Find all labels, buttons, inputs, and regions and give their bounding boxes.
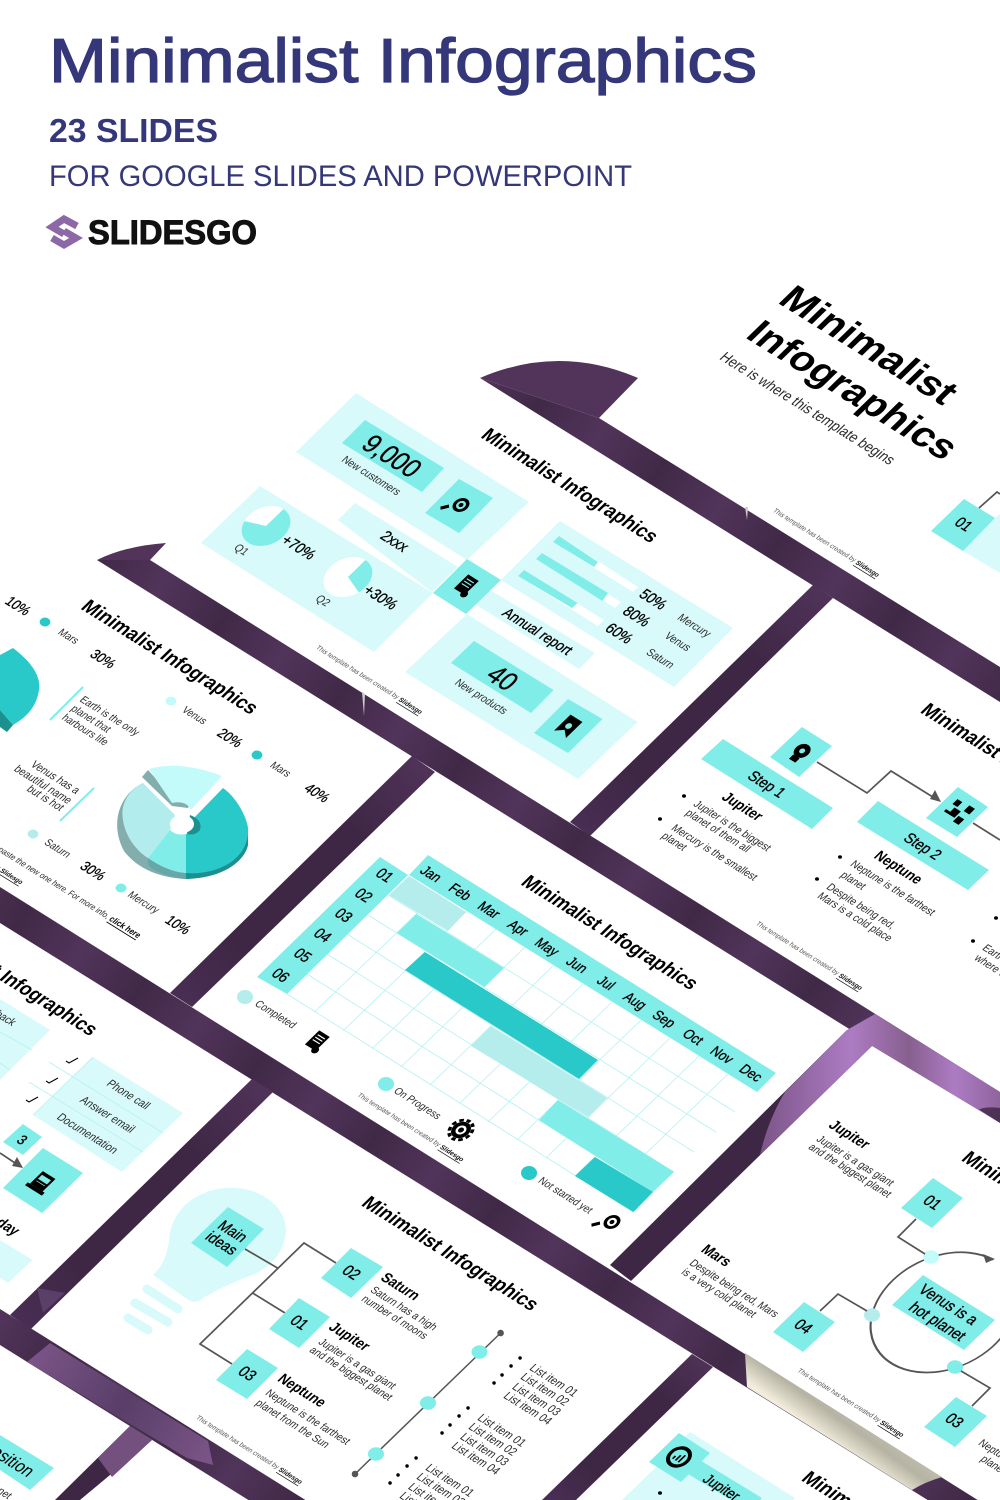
list group 3: List item 01 [422, 1462, 476, 1499]
task table: Documentation [54, 1112, 120, 1156]
list group 2: List item 03 [457, 1431, 511, 1468]
month header: Jul [593, 973, 619, 993]
annual report band: Annual report [498, 605, 576, 659]
month header: Apr [504, 917, 532, 939]
item 02 saturn: 02 [338, 1262, 364, 1284]
list group 2: List item 01 [474, 1412, 528, 1449]
panel: new customers [296, 393, 529, 560]
task table: Phone call [103, 1078, 153, 1112]
step 2: Step 2 [899, 831, 945, 863]
item 04: 04 [790, 1316, 817, 1338]
list group 2: List item 02 [465, 1421, 519, 1458]
row header: 05 [289, 946, 315, 966]
step 2: Neptune is the farthest [847, 858, 938, 918]
legend: left donut values: 10% [2, 594, 34, 618]
legend: mars: 40% [301, 781, 333, 805]
legend: saturn: Saturn [41, 838, 73, 861]
item 02 saturn: Saturn [376, 1270, 424, 1304]
step 2: Neptune [870, 848, 926, 888]
tree connectors [200, 1243, 336, 1364]
list group 1: List item 03 [509, 1381, 563, 1418]
list group 1: List item 01 [526, 1362, 580, 1399]
legend: saturn: 30% [77, 859, 109, 883]
item 01: 01 [919, 1192, 945, 1214]
chart: 3d donut [117, 766, 248, 879]
item 01 jupiter: 01 [286, 1312, 312, 1334]
step 2: planet [837, 869, 869, 892]
item 03 [924, 1371, 1000, 1479]
task table [26, 1057, 183, 1172]
panel: gantt slide [237, 855, 776, 1235]
list group 1: List item 04 [500, 1390, 555, 1428]
item 02 saturn: number of moons [358, 1293, 431, 1342]
panel: quarters with pies [201, 486, 433, 652]
panel: quarters with pies: Q2 [312, 593, 333, 609]
legend: venus: 20% [214, 726, 246, 750]
arrow: step 1 to step 2 [817, 762, 1000, 840]
legend: left donut values: 30% [87, 647, 119, 671]
panel: progress bars: 50% [635, 587, 670, 613]
callout: earth: planet that [68, 704, 113, 735]
panel: bottom right slide [622, 1432, 984, 1500]
panel: progress bars [501, 521, 733, 687]
step 1: planet of them all [682, 807, 753, 855]
footer credit: This template has been created by Slidesgo [771, 508, 881, 578]
month header: Nov [707, 1043, 737, 1067]
legend: mercury: 10% [162, 913, 194, 937]
title: Infographics [738, 313, 968, 467]
month header: Jun [563, 954, 591, 976]
item 03 neptune: Neptune is the farthest [262, 1387, 353, 1447]
arrow into icon box [0, 1153, 23, 1168]
box 01 preview [931, 492, 1000, 573]
main ideas box [191, 1207, 264, 1267]
row header: 02 [350, 886, 376, 906]
centre box: Venus is a [914, 1282, 982, 1329]
step 2: Despite being red, [823, 881, 898, 931]
callout: venus: Venus has a [28, 759, 83, 797]
main ideas box: Main [213, 1218, 251, 1246]
row header: 06 [267, 966, 293, 986]
footer credit: This template has been created by Slidesgo [355, 1092, 466, 1163]
panel: new customers: 9,000 [355, 429, 429, 483]
centre box: hot planet [904, 1299, 970, 1345]
month header: May [531, 935, 563, 959]
heading: Minimalist Infographics [356, 1193, 544, 1315]
item 01 [805, 1118, 963, 1254]
legend: mercury: Mercury [124, 890, 162, 916]
item 01 jupiter [269, 1298, 399, 1403]
panel: new products [405, 614, 638, 779]
item 04: Mars [697, 1242, 735, 1270]
title: Minimalist [770, 278, 968, 412]
step 1: planet [658, 830, 690, 853]
legend: saturn [28, 830, 109, 883]
item 04: Despite being red, Mars [686, 1257, 781, 1320]
legend: completed: Completed [252, 999, 299, 1031]
panel: quarters with pies: +70% [277, 533, 319, 563]
footer credit: This template has been created by Slidesgo [754, 921, 864, 991]
month header: Jan [417, 863, 445, 885]
gantt bars [389, 876, 674, 1212]
step 3 [971, 916, 1000, 992]
item 02 saturn: Saturn has a high [367, 1284, 440, 1333]
number 3 box: 3 [13, 1132, 31, 1148]
main ideas box: ideas [201, 1229, 241, 1259]
icon: qr [926, 787, 988, 837]
list group 1: List item 02 [517, 1371, 571, 1408]
step 2 [814, 801, 989, 944]
item 03 neptune: 03 [234, 1363, 260, 1385]
ring [840, 1230, 1000, 1395]
purple frame bands [0, 361, 1000, 1500]
row header: 03 [330, 906, 356, 926]
feedback panel [0, 997, 50, 1080]
subtitle: Here is where this template begins [715, 350, 899, 468]
month header: Oct [679, 1026, 707, 1048]
panel: checklist slide [0, 918, 183, 1283]
gantt grid [287, 893, 735, 1212]
callout: earth: harbours life [59, 713, 111, 748]
box 01 preview: 01 [950, 515, 976, 535]
year band: 2xxx [376, 529, 412, 556]
panel: quarters with pies: Q1 [231, 542, 251, 558]
list group 2: List item 04 [448, 1440, 503, 1478]
legend: venus: Venus [179, 705, 209, 727]
panel: progress bars: 60% [601, 621, 636, 647]
subtitle: FOR GOOGLE SLIDES AND POWERPOINT [49, 160, 632, 193]
heading: Minimalist Infographics [516, 872, 703, 994]
step 1: Step 1 [743, 769, 789, 801]
panel: steps slide [658, 700, 1000, 992]
legend: on progress: On Progress [391, 1086, 443, 1122]
row header [257, 857, 408, 994]
partial left donut [0, 648, 39, 732]
item 04: is a very cold planet [678, 1266, 759, 1320]
legend: venus [166, 696, 246, 750]
jupiter card [622, 1432, 795, 1500]
callout: earth: Earth is the only [77, 695, 142, 739]
panel: radial slide [678, 1118, 1000, 1479]
centre box [892, 1275, 995, 1350]
annual report band [470, 590, 595, 669]
item 03 neptune [216, 1349, 353, 1451]
panel: donut chart slide [0, 594, 333, 940]
callout: venus [11, 759, 94, 821]
icon: lamp [770, 727, 832, 777]
panel: progress bars: Venus [661, 630, 694, 654]
panel: progress bars: Mercury [674, 612, 714, 640]
year band [338, 503, 458, 592]
main heading: Minimalist Infographics [49, 27, 757, 96]
item 01 jupiter: Jupiter [325, 1320, 374, 1355]
item 01 jupiter: Jupiter is a gas giant [315, 1336, 399, 1392]
month header: Aug [620, 989, 650, 1013]
footer credit: This template has been created by Slidesgo [314, 645, 424, 715]
legend: mars: Mars [267, 760, 293, 780]
item 03 neptune: Neptune [273, 1371, 330, 1411]
number 3 box [3, 1124, 42, 1155]
legend: not started: Not started yet [535, 1176, 595, 1216]
panel: progress bars: 80% [618, 604, 654, 630]
centre report icon box [433, 559, 501, 614]
brand name: SLIDESGO [88, 214, 257, 252]
legend: left donut values: Mars [55, 627, 81, 647]
task table: Answer email [77, 1094, 137, 1136]
panel: dashboard slide [201, 393, 733, 779]
list group 1 [494, 1358, 580, 1428]
item 01: Jupiter is a gas giant [813, 1133, 897, 1189]
panel: position slide [0, 1435, 54, 1500]
month header: Feb [445, 881, 475, 904]
item 01: and the biggest planet [805, 1141, 894, 1200]
icon: light bulb [128, 1188, 286, 1330]
step 1: Mercury is the smallest [668, 822, 760, 883]
callout: venus: but is hot [24, 783, 67, 814]
item 01 jupiter: and the biggest planet [306, 1344, 395, 1403]
item 04 [678, 1242, 867, 1352]
icon: slidesgo logo [52, 219, 77, 245]
row header: 01 [371, 866, 397, 886]
list group 2 [442, 1408, 528, 1478]
month header [409, 855, 776, 1092]
legend: left donut values [2, 594, 119, 671]
panel: main ideas slide [128, 1188, 580, 1500]
footer credit: This template has been created by Slidesgo [194, 1415, 304, 1485]
legend: completed [237, 990, 332, 1055]
frame highlights [27, 507, 1000, 1490]
panel: quarters with pies: +30% [359, 583, 401, 613]
step 1: Jupiter is the biggest [690, 798, 774, 854]
item 03 neptune: planet from the Sun [252, 1397, 332, 1451]
panel: progress bars: Saturn [643, 647, 677, 671]
legend: mercury [116, 884, 194, 937]
step 1 [658, 739, 833, 883]
legend: mars [252, 750, 333, 805]
list group 3 [390, 1458, 476, 1500]
item 01: Jupiter [825, 1118, 874, 1153]
timeline [352, 1330, 504, 1477]
month header: Mar [474, 899, 504, 922]
legend: on progress [378, 1077, 478, 1144]
icon: newspaper [3, 1148, 83, 1213]
legend: not started [521, 1166, 624, 1235]
callout: earth [50, 687, 142, 748]
heading: Minimalist Infographics [76, 596, 263, 719]
month header: Sep [649, 1007, 679, 1031]
month header: Dec [736, 1061, 766, 1085]
item 03: 03 [941, 1410, 967, 1432]
step 2: Mars is a cold place [814, 890, 895, 944]
lower table [0, 1240, 32, 1283]
footer credit: This template has been created by Slidesgo [795, 1368, 906, 1438]
title [738, 278, 968, 467]
heading: Minimalist Infographics [476, 425, 663, 547]
callout: venus: beautiful name [11, 763, 75, 807]
header block [49, 27, 757, 252]
slides count: 23 SLIDES [49, 112, 218, 149]
panel: new products: 40 [480, 660, 525, 696]
panel: title slide [715, 278, 1000, 578]
item 02 saturn [321, 1248, 440, 1342]
panel: new products: New products [452, 677, 510, 717]
row header: 04 [309, 926, 335, 946]
step 1: Jupiter [718, 790, 767, 825]
panel: new customers: New customers [338, 454, 404, 498]
